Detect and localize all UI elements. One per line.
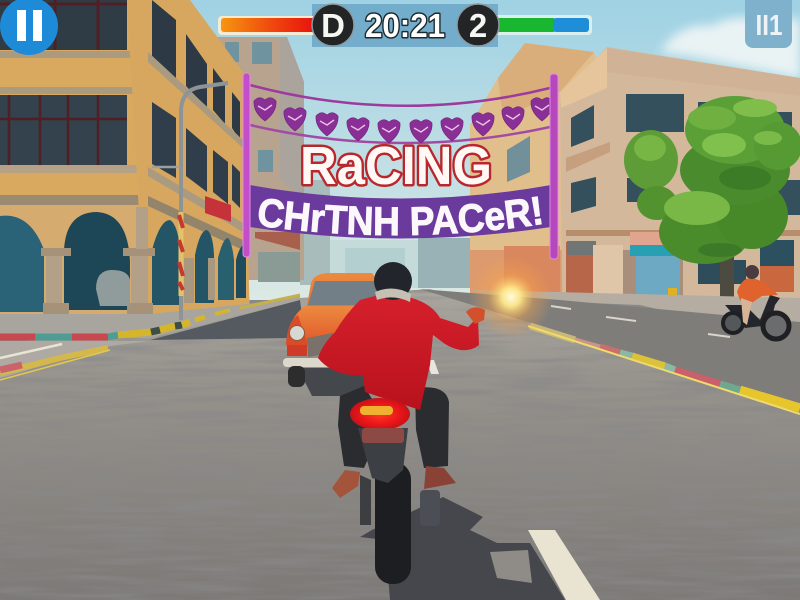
- cloud: [660, 18, 800, 78]
- left road markings: [0, 344, 110, 380]
- median stripe right: [528, 326, 800, 414]
- fender: [358, 428, 408, 483]
- pause button: [0, 0, 58, 55]
- pavement right: [470, 290, 800, 342]
- tail light: [350, 398, 410, 430]
- motorbike rider: [318, 262, 485, 584]
- orange car: [283, 273, 385, 396]
- heart pattern: [258, 105, 549, 132]
- grille: [307, 333, 333, 357]
- dark shadow lane left: [150, 300, 305, 340]
- building: left corner block: [0, 0, 250, 320]
- sunlit patch in shadow: [490, 550, 532, 583]
- right rear building: [470, 43, 620, 300]
- banner poles: [243, 73, 558, 259]
- building: far left: [205, 37, 304, 282]
- car shadow: [298, 368, 365, 396]
- windshield: [308, 281, 380, 305]
- right front building: [560, 47, 800, 302]
- red jacket: [318, 294, 479, 410]
- distant rider: [723, 265, 789, 339]
- center lane dash: [427, 360, 439, 374]
- road: [0, 289, 800, 600]
- motorbike rider shadow: [360, 497, 565, 600]
- menu button: [745, 0, 792, 48]
- arcade arches: [0, 207, 246, 315]
- front facade: [0, 0, 150, 315]
- distant hazy street: [300, 180, 472, 288]
- banner subtitle: CHrTNH PACeR!: [258, 196, 542, 236]
- tree: [624, 96, 800, 298]
- rival health bar: [492, 15, 592, 35]
- rider boots: [332, 466, 456, 498]
- sky: [0, 0, 800, 300]
- pavement left: [0, 295, 300, 338]
- HUD: [0, 0, 792, 55]
- sign on building: [205, 196, 231, 222]
- rider hand: [466, 307, 485, 324]
- menu button: II1: [756, 10, 782, 42]
- banner: [242, 72, 558, 260]
- match timer: 20:21: [365, 7, 445, 44]
- foreground lane dash: [528, 530, 600, 600]
- banner strings: [250, 85, 550, 143]
- player health bar: [218, 16, 318, 35]
- light wedge left: [0, 341, 150, 378]
- rival badge: 2: [469, 7, 487, 44]
- curb stripe left: [0, 295, 300, 337]
- rider legs: [338, 386, 449, 468]
- muzzle flare: [469, 255, 553, 339]
- HUD center band: [312, 4, 498, 47]
- headlight: [290, 326, 304, 340]
- helmet: [374, 262, 412, 300]
- banner cloth: [250, 185, 551, 238]
- rear wheel: [375, 462, 411, 584]
- exhaust: [420, 490, 440, 526]
- ground floor shops: [566, 232, 794, 302]
- rival badge: [457, 4, 499, 46]
- heart pennants: [254, 98, 553, 143]
- street lamp: [152, 83, 228, 320]
- player badge: [312, 4, 354, 46]
- windows: [571, 94, 800, 215]
- car bonnet: [286, 306, 382, 345]
- banner title: RaCING: [300, 136, 492, 196]
- lane marks right: [551, 306, 730, 337]
- side facade: [127, 0, 250, 320]
- player badge: D: [321, 7, 345, 44]
